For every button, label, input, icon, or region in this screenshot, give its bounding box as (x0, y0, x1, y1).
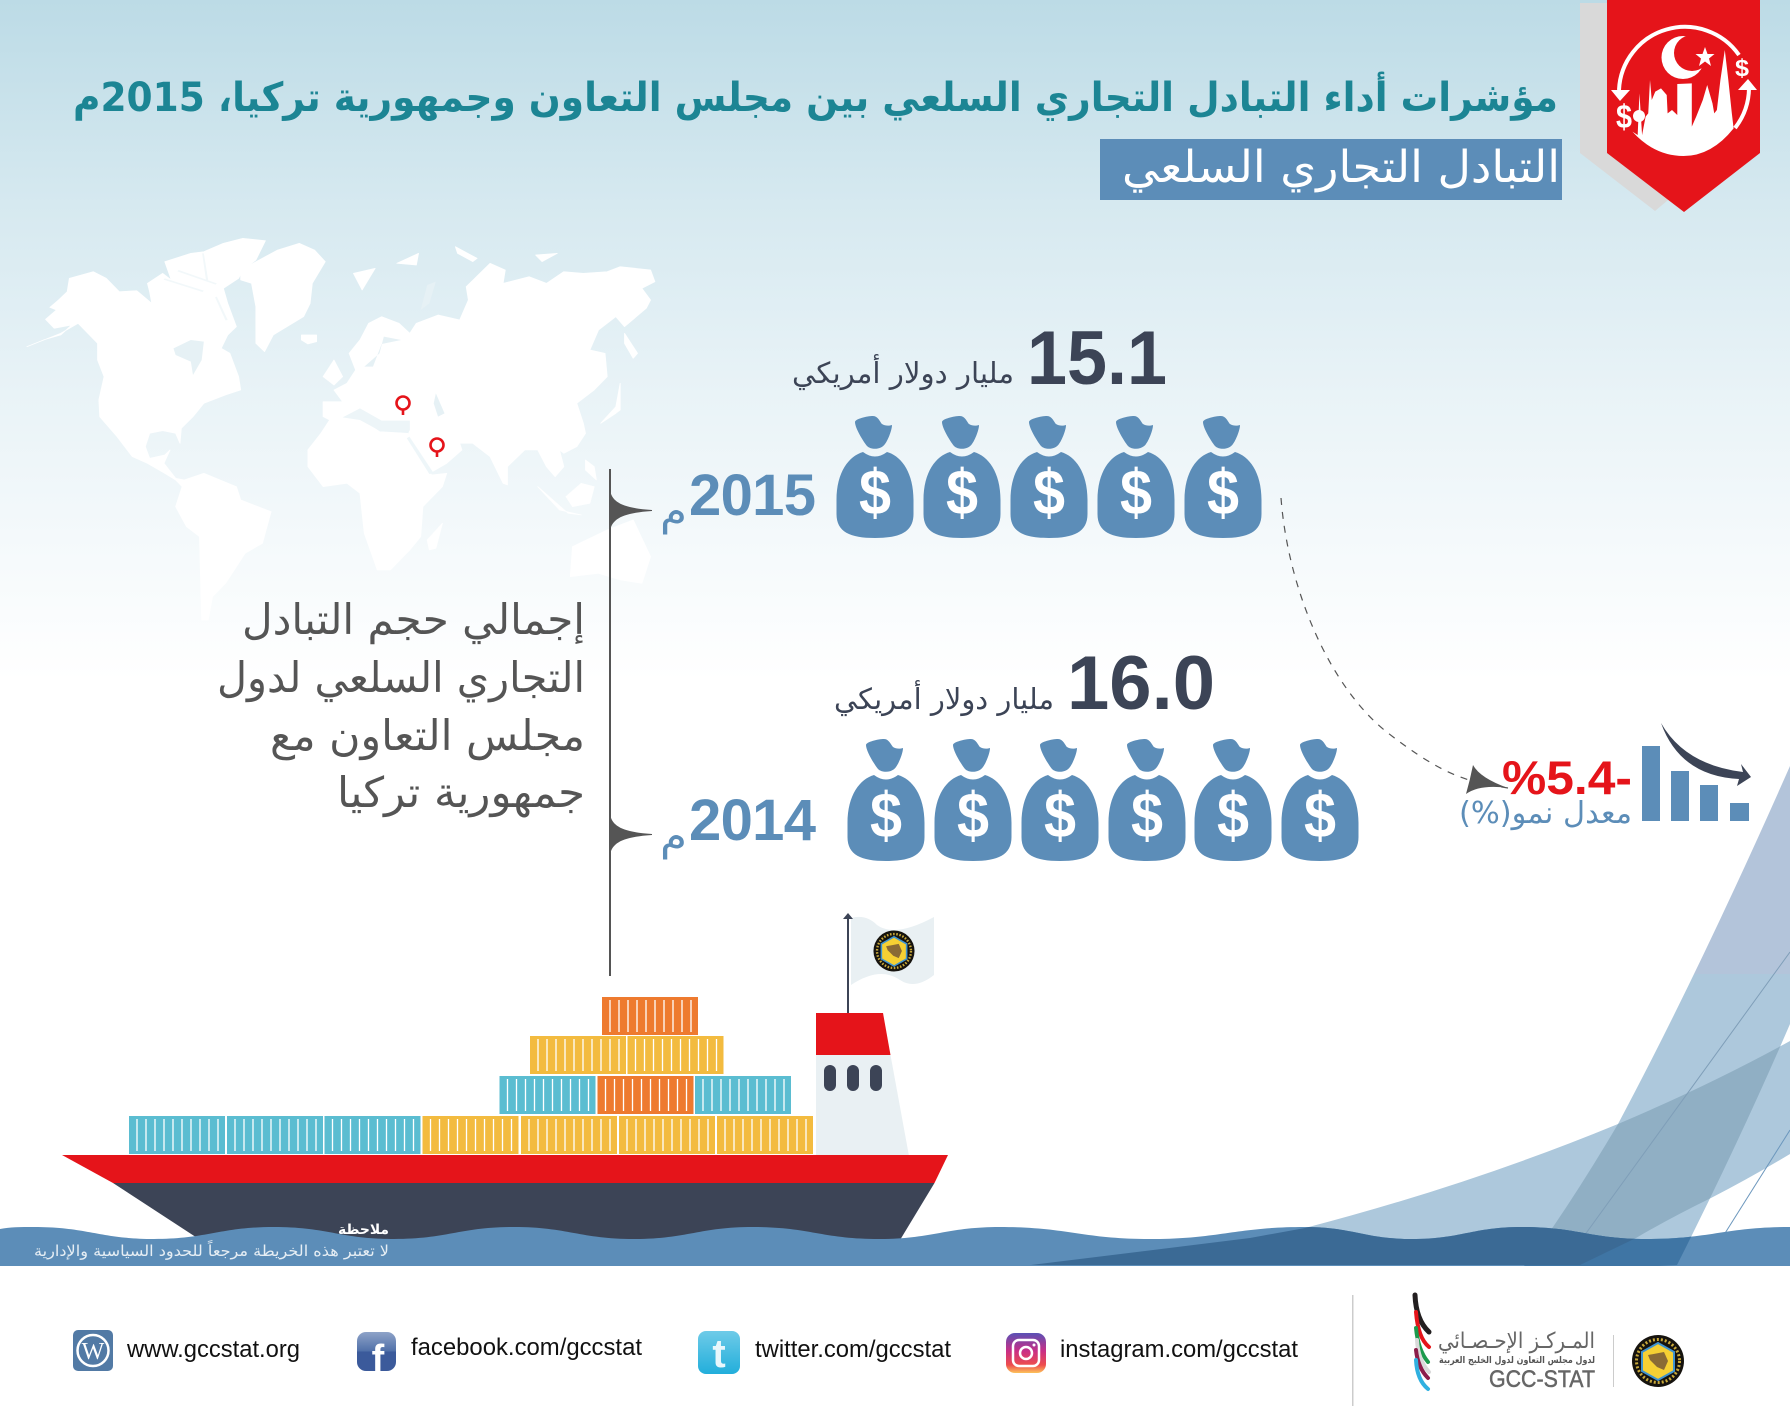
value 2015: 15.1 (1027, 316, 1167, 401)
decorative sails (1309, 766, 1790, 1239)
footer links (73, 1330, 1298, 1380)
map pin: Turkey (396, 396, 410, 415)
logo Arabic name: المـركـز الإحـصـائي (1438, 1329, 1595, 1354)
money bags 2014: $ (1217, 779, 1249, 851)
value 2014: مليار دولار أمريكي (834, 679, 1054, 717)
year label 2014: م (660, 814, 687, 860)
money bags 2015: $ (1033, 456, 1065, 528)
total trade description (217, 595, 585, 818)
money bags 2014 (848, 739, 1358, 861)
banner icon (1580, 0, 1760, 212)
money bags 2014: $ (957, 779, 989, 851)
circular arrows (1619, 27, 1749, 128)
crescent and star (1662, 35, 1714, 79)
total trade description: جمهورية تركيا (337, 768, 585, 818)
logo Arabic subtitle: لدول مجلس التعاون لدول الخليج العربية (1439, 1355, 1595, 1366)
ship tower (816, 1013, 909, 1156)
icon: website (73, 1330, 113, 1371)
red banner (1607, 0, 1760, 212)
logo ribbon (1415, 1295, 1429, 1389)
facebook link: facebook.com/gccstat (411, 1334, 642, 1361)
twitter link: twitter.com/gccstat (755, 1336, 951, 1363)
year label 2015: م (660, 489, 687, 535)
icon: website: W (82, 1339, 105, 1365)
background gradient (0, 0, 1790, 680)
icon: facebook: f (372, 1338, 385, 1380)
icon: instagram (1006, 1333, 1046, 1373)
dollar signs: $ (1735, 55, 1750, 82)
value 2014 (834, 641, 1215, 726)
title: مؤشرات أداء التبادل التجاري السلعي بين مجلس التعاون وجمهورية تركيا، 2015م (73, 71, 1558, 121)
falling arrow (1661, 723, 1751, 786)
growth rate (1459, 723, 1751, 831)
wave shaded overlap (1032, 1227, 1692, 1266)
total trade description: التجاري السلعي لدول (217, 653, 585, 703)
ship (62, 913, 948, 1245)
note text: لا تعتبر هذه الخريطة مرجعاً للحدود السياسية والإدارية (34, 1240, 389, 1260)
map pin: GCC (430, 438, 444, 457)
value 2015 (792, 316, 1167, 401)
GCC-STAT logo (1415, 1295, 1684, 1393)
note heading: ملاحظة (338, 1222, 389, 1238)
GCC emblem (1632, 1335, 1684, 1387)
total trade description: مجلس التعاون مع (270, 711, 585, 761)
city skyline (1632, 50, 1734, 156)
growth value: %5.4- (1502, 751, 1632, 804)
value 2014: 16.0 (1067, 641, 1215, 726)
money bags 2014: $ (870, 779, 902, 851)
icon: facebook (357, 1332, 396, 1380)
banner icon: $ (1616, 98, 1632, 135)
map seas and bays (164, 253, 445, 474)
icon: twitter: t (712, 1332, 726, 1376)
money bags 2015: $ (859, 456, 891, 528)
money bags 2015: $ (1120, 456, 1152, 528)
world map (27, 238, 655, 620)
year label 2015: 2015 (689, 463, 816, 528)
timeline axis (609, 469, 652, 976)
money bags 2014: $ (1131, 779, 1163, 851)
money bags 2014: $ (1304, 779, 1336, 851)
dashed arrow (1281, 498, 1508, 794)
map note (34, 1222, 389, 1260)
containers (129, 997, 813, 1154)
logo GCC-STAT text: GCC-STAT (1489, 1366, 1595, 1393)
sea waves (0, 1227, 1790, 1266)
banner shadow (1580, 3, 1680, 211)
ship hull (62, 1155, 948, 1245)
falling bar icon (1642, 746, 1749, 821)
money bags 2015: $ (1207, 456, 1239, 528)
value 2015: مليار دولار أمريكي (792, 353, 1014, 391)
ship flag pole and flag (843, 913, 934, 1013)
total trade description: إجمالي حجم التبادل (242, 595, 585, 645)
icon: twitter (698, 1331, 740, 1376)
website link: www.gccstat.org (126, 1336, 300, 1363)
year label 2014: 2014 (689, 788, 816, 853)
growth label: معدل نمو(%) (1459, 796, 1632, 831)
money bags 2015 (836, 416, 1262, 538)
instagram link: instagram.com/gccstat (1060, 1336, 1298, 1363)
money bags 2014: $ (1044, 779, 1076, 851)
money bags 2015: $ (946, 456, 978, 528)
subtitle box: التبادل التجاري السلعي (1122, 142, 1560, 193)
